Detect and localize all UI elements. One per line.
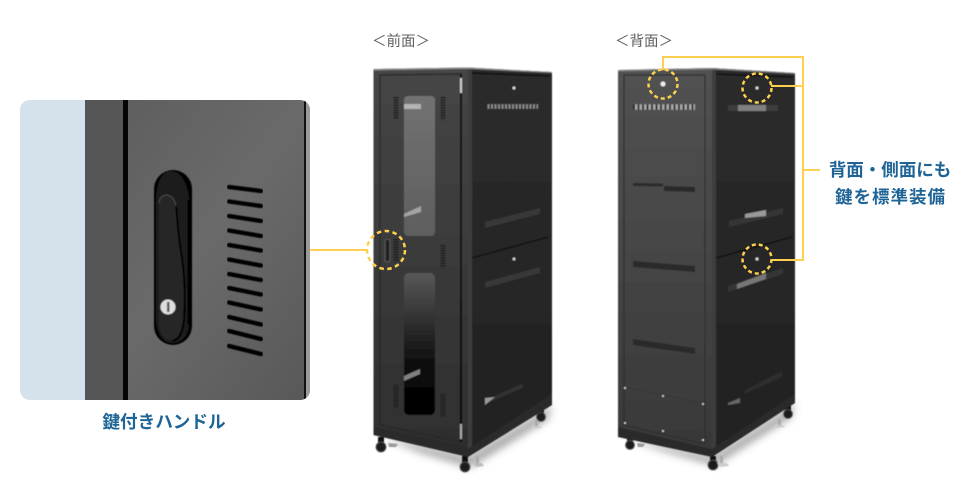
label: rear view: ＜背面＞ [615,33,673,50]
lower window [404,273,435,415]
cabinet: front view [374,68,552,472]
rear face [618,68,712,457]
side panel [712,68,795,457]
upper window [404,96,435,236]
rear vents [624,107,704,441]
casters [376,408,546,472]
floor shadow [625,403,795,466]
panel: handle close-up [20,100,310,400]
side panel [468,68,552,457]
vent slots [229,187,261,354]
label: front view: ＜前面＞ [372,33,430,50]
side panel vents [485,86,540,405]
casters [626,405,792,470]
door vents [396,97,443,417]
door face [374,68,468,457]
floor shadow [380,405,552,468]
callout connector: rear and side locks [648,57,820,274]
icon: locking handle [154,170,192,345]
side panel vents [660,82,783,405]
door handle [385,239,390,262]
callout connector: handle [310,231,405,269]
heading: handle caption: 鍵付きハンドル [102,412,226,432]
callout text: rear and side locks: 鍵を標準装備 [835,187,946,207]
cabinet: rear view [618,68,795,470]
callout text: rear and side locks: 背面・側面にも [829,160,951,180]
